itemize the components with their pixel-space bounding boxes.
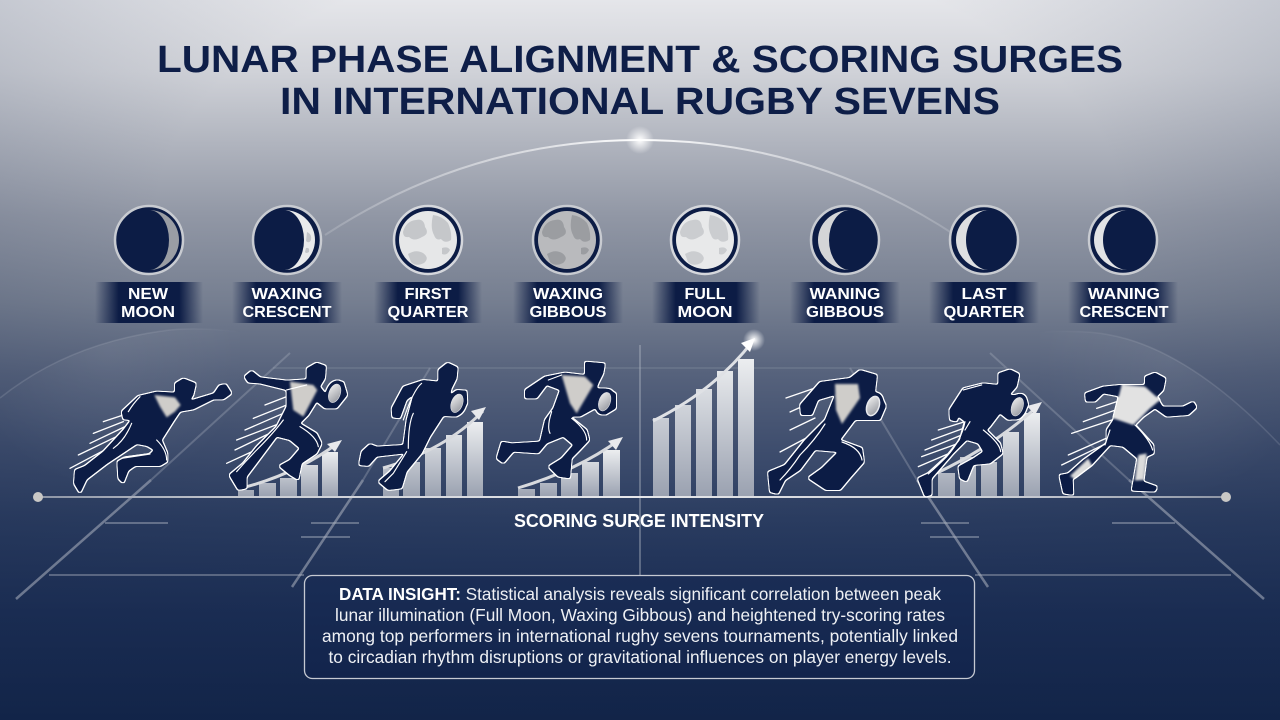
label: waning gibbous: WANING: [810, 286, 880, 303]
label: new moon: MOON: [121, 304, 175, 321]
moon: new moon: [115, 206, 183, 274]
runner: waxing gibbous: [497, 362, 618, 478]
runner: waxing crescent: [227, 363, 348, 490]
moon: waning crescent: [1089, 206, 1157, 274]
bar chart: full moon: [653, 329, 765, 497]
runner: waning gibbous: [768, 370, 887, 494]
label: waning crescent: CRESCENT: [1080, 304, 1169, 321]
label: last quarter: QUARTER: [944, 304, 1025, 321]
label: last quarter: [929, 282, 1039, 323]
label: new moon: [95, 282, 203, 323]
label: first quarter: [374, 282, 482, 323]
moon: waxing crescent: [253, 206, 321, 274]
title: LUNAR PHASE ALIGNMENT & SCORING SURGES: [157, 39, 1123, 81]
runner: first quarter: [359, 363, 470, 490]
moon: last quarter: [950, 206, 1018, 274]
moon: waning gibbous: [811, 206, 879, 274]
data insight panel: among top performers in international rughy sevens tournaments, potentially linked: [322, 626, 958, 646]
label: waxing crescent: WAXING: [252, 286, 322, 303]
label: waxing crescent: [232, 282, 342, 323]
bar chart: first quarter: [383, 407, 486, 497]
label: full moon: FULL: [684, 286, 726, 303]
runner: last quarter: [918, 369, 1031, 497]
title: [157, 39, 1123, 123]
label: first quarter: QUARTER: [388, 304, 469, 321]
bar chart: last quarter: [937, 402, 1042, 497]
title: IN INTERNATIONAL RUGBY SEVENS: [280, 81, 1000, 123]
moon: full moon: [671, 206, 739, 274]
bar chart: waxing gibbous: [518, 437, 623, 497]
field lines: [16, 345, 1264, 599]
axis line with end markers: [33, 492, 1231, 502]
label: waxing gibbous: WAXING: [533, 286, 603, 303]
data insight panel: to circadian rhythm disruptions or gravitational influences on player energy levels.: [328, 647, 952, 667]
label: waning gibbous: GIBBOUS: [806, 304, 884, 321]
lunar arc with glow: [325, 126, 955, 235]
axis label: SCORING SURGE INTENSITY: [514, 511, 764, 531]
runner: new moon: [70, 378, 232, 493]
data insight panel: DATA INSIGHT: Statistical analysis reveals significant correlation between peak: [339, 584, 941, 604]
label: waning crescent: [1068, 282, 1178, 323]
label: last quarter: LAST: [962, 286, 1007, 303]
label: first quarter: FIRST: [404, 286, 452, 303]
label: waxing gibbous: [513, 282, 623, 323]
data insight panel: [304, 576, 974, 678]
moon: first quarter: [394, 206, 462, 274]
label: waxing gibbous: GIBBOUS: [530, 304, 607, 321]
label: new moon: NEW: [128, 286, 169, 303]
label: waxing crescent: CRESCENT: [242, 304, 332, 321]
data insight panel: lunar illumination (Full Moon, Waxing Gibbous) and heightened try-scoring rates: [335, 605, 945, 625]
bar chart: waxing crescent: [238, 440, 342, 497]
label: full moon: MOON: [678, 304, 732, 321]
runner: waning crescent: [1059, 373, 1197, 495]
label: waning crescent: WANING: [1088, 286, 1160, 303]
label: full moon: [652, 282, 760, 323]
label: waning gibbous: [790, 282, 900, 323]
moon: waxing gibbous: [533, 206, 601, 274]
